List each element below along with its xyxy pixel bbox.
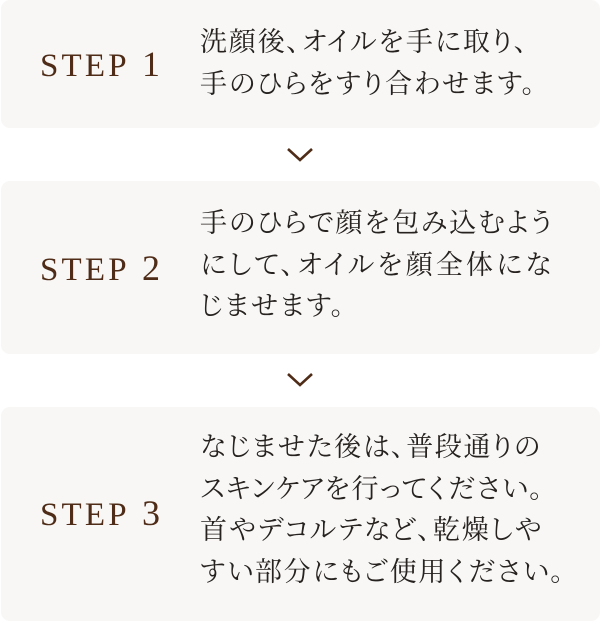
step 3 text — [200, 432, 566, 586]
step 1 text: 手のひらをすり合わせます。 — [200, 68, 537, 98]
step 3 text: すい部分にもご使用ください。 — [200, 556, 566, 586]
step 3 text: なじませた後は、普段通りの — [200, 432, 542, 462]
step 3 text: 首やデコルテなど、乾燥しや — [200, 515, 543, 545]
step 2 text: にして、オイルを顔全体にな — [200, 250, 554, 280]
panel: step 2 — [1, 181, 600, 354]
step 1 text — [200, 27, 537, 98]
step 1 label: STEP 1 — [40, 44, 160, 84]
step 2 text: じませます。 — [200, 291, 346, 321]
step 2 text: 手のひらで顔を包み込むよう — [200, 208, 553, 238]
arrow: down chevron 2 — [287, 373, 313, 387]
panel: step 1 — [1, 0, 600, 128]
arrow: down chevron 1 — [287, 148, 313, 162]
panel: step 3 — [1, 407, 600, 621]
step 1 text: 洗顔後、オイルを手に取り、 — [200, 27, 530, 57]
step 2 label: STEP 2 — [40, 248, 160, 288]
step 2 text — [200, 208, 554, 321]
step 3 text: スキンケアを行ってください。 — [200, 474, 544, 504]
step 3 label: STEP 3 — [40, 493, 160, 533]
